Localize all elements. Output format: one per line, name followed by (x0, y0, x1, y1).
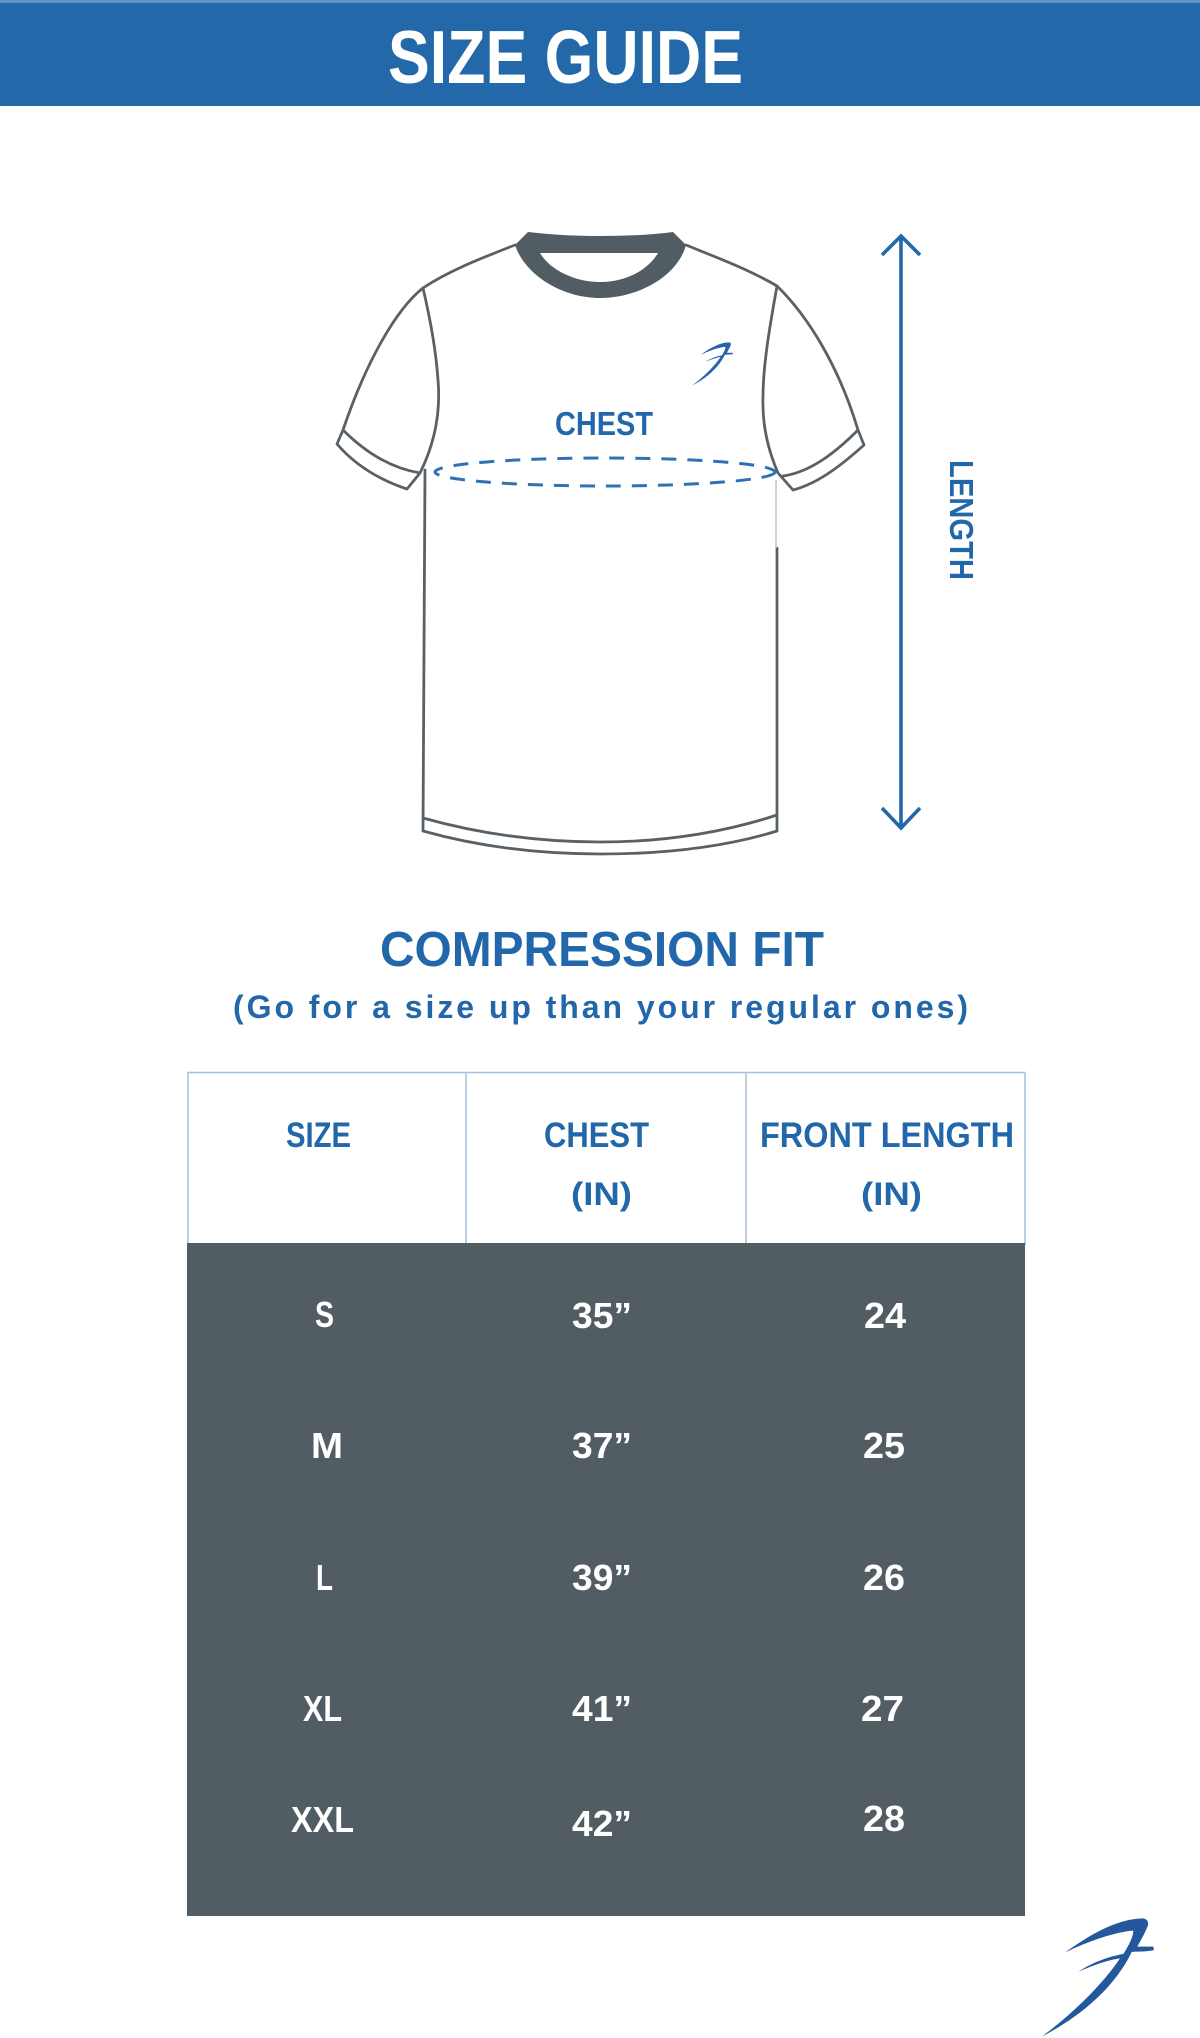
brand logo (1042, 1918, 1154, 2037)
header bar (0, 0, 1200, 106)
right sleeve (763, 286, 864, 490)
row XL: XL (303, 1688, 342, 1729)
row M: 25 (863, 1425, 905, 1466)
row M: M (311, 1425, 343, 1466)
t-shirt diagram (337, 232, 864, 854)
row XXL: 42” (572, 1803, 632, 1844)
table header (188, 1072, 1025, 1244)
row S: 24 (864, 1295, 906, 1336)
row M (311, 1425, 905, 1466)
chest dashed ellipse (435, 458, 775, 486)
left sleeve (337, 288, 439, 489)
table body (187, 1243, 1025, 1916)
row XXL: XXL (291, 1799, 354, 1840)
table header: (IN) (571, 1176, 632, 1212)
row L: L (316, 1557, 333, 1598)
table header: SIZE (286, 1116, 351, 1155)
row XL (303, 1688, 904, 1729)
shirt body outline (423, 245, 777, 854)
chest label: CHEST (555, 405, 653, 442)
row S: 35” (572, 1295, 632, 1336)
size table (187, 1072, 1025, 1916)
table header: CHEST (544, 1116, 649, 1155)
row M: 37” (572, 1425, 632, 1466)
row S: S (315, 1294, 334, 1335)
length label: LENGTH (943, 460, 980, 580)
title: SIZE GUIDE (388, 15, 743, 99)
faded right side seam (775, 480, 777, 548)
subheading: (Go for a size up than your regular ones) (233, 989, 968, 1025)
row L (316, 1557, 905, 1598)
row XXL: 28 (863, 1798, 905, 1839)
heading: compression fit: COMPRESSION FIT (380, 923, 824, 977)
row XXL (291, 1798, 905, 1844)
row L: 26 (863, 1557, 905, 1598)
table header: (IN) (861, 1176, 922, 1212)
chest logo (692, 342, 733, 386)
length arrow (882, 236, 980, 828)
row XL: 41” (572, 1688, 632, 1729)
collar (515, 232, 686, 298)
table header: FRONT LENGTH (760, 1116, 1014, 1155)
row L: 39” (572, 1557, 632, 1598)
row XL: 27 (861, 1688, 904, 1729)
row S (315, 1294, 906, 1336)
